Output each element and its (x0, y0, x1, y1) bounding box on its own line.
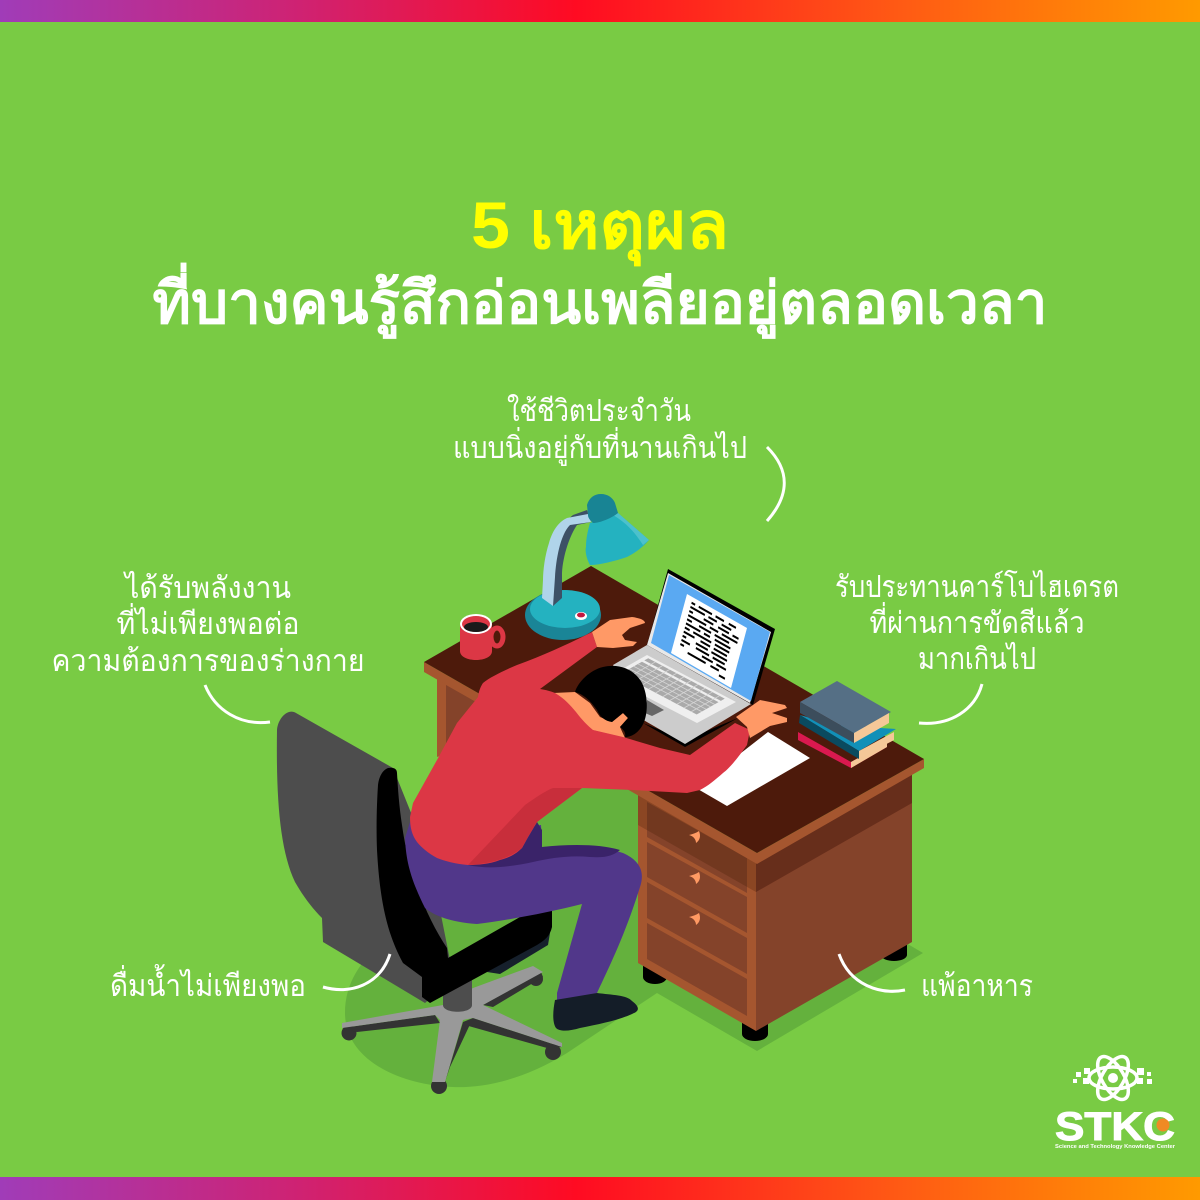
drawer pedestal side (756, 770, 912, 1031)
lamp shade (586, 513, 649, 565)
caption: not enough water: ดื่มน้ำไม่เพียงพอ (110, 964, 306, 1003)
chair column (443, 975, 472, 1012)
caption: refined carbohydrates: รับประทานคาร์โบไฮเดรต (835, 569, 1119, 604)
neck and ear (553, 692, 628, 738)
sweater (410, 632, 750, 865)
chair back (277, 712, 527, 1003)
bottom book (798, 732, 887, 768)
right hand (736, 700, 787, 738)
laptop screen (651, 575, 770, 701)
logo pixel squares (1073, 1068, 1152, 1084)
hair (575, 666, 647, 737)
logo: STKC (1055, 1052, 1176, 1150)
office chair (277, 712, 562, 1094)
caption: refined carbohydrates (835, 569, 1119, 676)
chair base (342, 966, 562, 1094)
arrow: right caption (919, 684, 982, 723)
person (405, 617, 787, 1031)
caption: refined carbohydrates: มากเกินไป (918, 641, 1036, 676)
caption: insufficient energy: ความต้องการของร่างกาย (52, 645, 364, 678)
arrow: water caption (323, 954, 390, 990)
top book (800, 681, 891, 733)
laptop keyboard (608, 655, 736, 723)
paper (696, 732, 810, 806)
caption: insufficient energy: ที่ไม่เพียงพอต่อ (116, 603, 300, 641)
arrow: allergy caption (839, 954, 905, 991)
top gradient bar (0, 0, 1200, 22)
drawer knobs (689, 831, 700, 925)
bottom gradient bar (0, 1177, 1200, 1200)
logo atom icon (1089, 1052, 1137, 1104)
laptop (608, 569, 775, 747)
second shoe under seat (487, 933, 550, 974)
coffee mug (460, 614, 503, 660)
title: 5 เหตุผล (471, 188, 729, 267)
caption: refined carbohydrates: ที่ผ่านการขัดสีแล้ว (870, 602, 1084, 640)
caption: insufficient energy: ได้รับพลังงาน (123, 570, 291, 605)
middle book (800, 715, 896, 751)
logo wordmark: STKC (1055, 1105, 1175, 1149)
shoe (553, 993, 638, 1031)
caption: sedentary routine: แบบนิ่งอยู่กับที่นานเกินไป (453, 427, 747, 466)
desk feet (643, 945, 907, 1041)
desk (424, 566, 924, 1041)
logo tagline: Science and Technology Knowledge Center (1055, 1144, 1176, 1150)
laptop base (643, 718, 738, 747)
caption: food allergy: แพ้อาหาร (921, 970, 1033, 1003)
books (798, 681, 896, 768)
laptop screen frame (647, 569, 775, 705)
lamp (525, 494, 649, 640)
desk left leg (437, 674, 482, 757)
lamp arm (548, 510, 591, 606)
logo orange dot (1156, 1118, 1170, 1132)
floor shadow (345, 785, 923, 1087)
trousers (405, 822, 642, 1003)
document on screen (671, 594, 747, 688)
trackpad (645, 700, 664, 716)
desk edge (424, 662, 924, 864)
arrow: left caption (205, 685, 270, 723)
caption: insufficient energy (52, 570, 364, 678)
arrow: top caption (767, 447, 784, 521)
title: ที่บางคนรู้สึกอ่อนเพลียอยู่ตลอดเวลา (152, 262, 1048, 339)
sweater shadow (468, 788, 582, 865)
drawer pedestal front (638, 790, 756, 1031)
caption: sedentary routine: ใช้ชีวิตประจำวัน (507, 394, 691, 428)
lamp base (525, 590, 601, 640)
desk top (424, 566, 924, 853)
title (152, 188, 1048, 339)
chair frame (377, 768, 552, 1003)
caption: sedentary routine (453, 394, 747, 466)
left hand (592, 617, 645, 648)
